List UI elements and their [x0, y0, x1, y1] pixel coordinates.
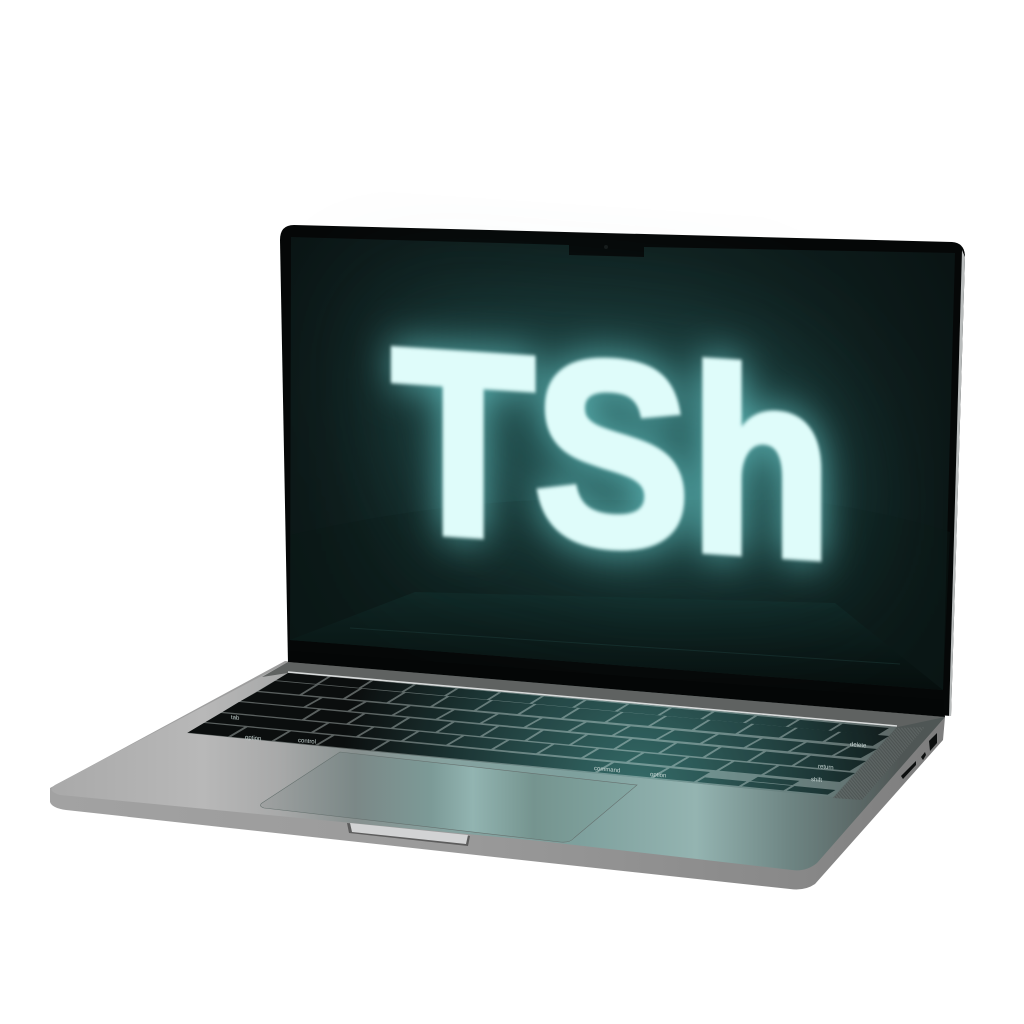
keys: shift row: [206, 713, 855, 782]
glowing TSh text: TSh: [392, 294, 832, 614]
base outer rim: [50, 661, 945, 889]
key legends: delete: [850, 742, 867, 750]
laptop lid: [280, 225, 965, 716]
laptop base: [50, 651, 945, 889]
key legends: control: [298, 738, 316, 746]
speaker grille: [833, 727, 925, 800]
keyboard teal light: [187, 673, 897, 797]
laptop illustration: [50, 225, 965, 889]
key legends: option: [650, 772, 666, 779]
base top surface: [51, 662, 945, 870]
side ports: [901, 733, 937, 779]
front notch: [347, 823, 470, 846]
rear strip behind keyboard: [262, 662, 945, 727]
hinge: [288, 651, 945, 717]
keys: caps row: [223, 702, 866, 771]
trackpad: [260, 752, 637, 842]
key legends: return: [818, 764, 834, 771]
key legends: command: [594, 766, 620, 774]
key legends: option: [245, 735, 261, 742]
camera: [604, 245, 608, 249]
key legends: [231, 715, 867, 784]
keys: function row: [276, 673, 889, 735]
screen reflection: [290, 500, 950, 690]
keys: tab row: [241, 692, 877, 758]
keys: number row: [259, 681, 889, 746]
keyboard: [187, 673, 897, 797]
key legends: shift: [811, 777, 822, 784]
screen: [290, 237, 955, 690]
keys: bottom row: [188, 723, 844, 795]
key legends: tab: [231, 715, 240, 722]
